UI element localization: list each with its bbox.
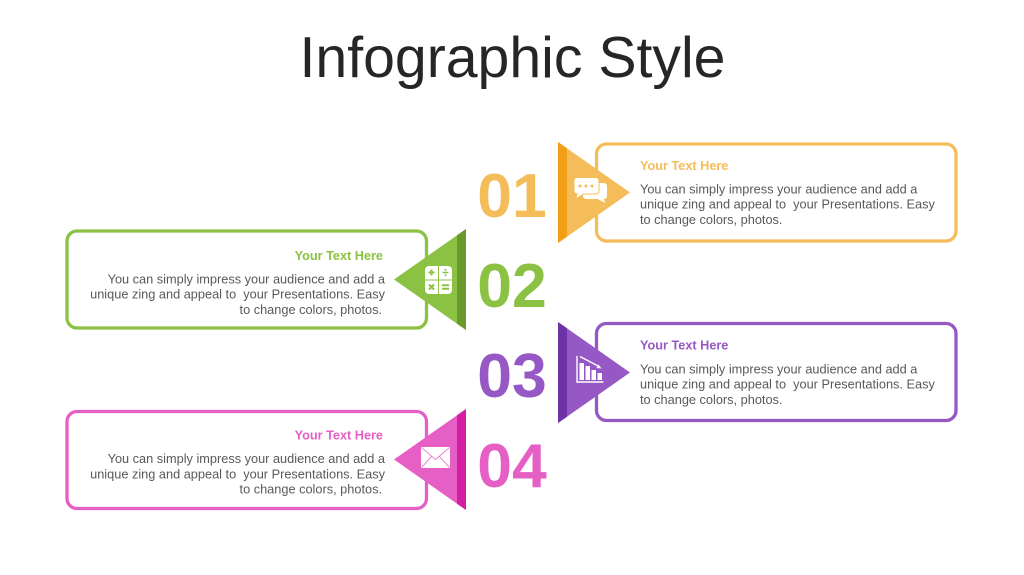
body text 02: unique zing and appeal to your Presentations. Easy — [90, 287, 386, 302]
heading 01: Your Text Here — [640, 159, 728, 173]
body text 01: to change colors, photos. — [640, 212, 782, 227]
number 02: 02 — [477, 251, 547, 321]
arrow 02 — [394, 229, 466, 330]
title: Infographic Style — [300, 26, 725, 90]
text box 04 — [67, 412, 426, 508]
text box 02 — [67, 231, 426, 328]
body text 03: unique zing and appeal to your Presentations. Easy — [640, 377, 935, 392]
heading 03: Your Text Here — [640, 338, 728, 352]
arrow 04 — [394, 409, 466, 510]
panel: step 04 — [67, 409, 547, 510]
panel: step 02 — [67, 229, 547, 330]
body text 04: You can simply impress your audience and add a — [108, 451, 385, 466]
body text 04: unique zing and appeal to your Presentations. Easy — [90, 466, 386, 481]
number 04: 04 — [477, 431, 547, 501]
body text 03: You can simply impress your audience and add a — [640, 361, 917, 376]
heading 04: Your Text Here — [295, 428, 383, 442]
body text 01: You can simply impress your audience and add a — [640, 181, 917, 196]
body text 01: unique zing and appeal to your Presentations. Easy — [640, 197, 935, 212]
panel: step 03 — [477, 322, 956, 423]
body text 02: You can simply impress your audience and add a — [108, 271, 385, 286]
heading 02: Your Text Here — [295, 249, 383, 263]
panel: step 01 — [477, 142, 956, 243]
arrow 03 — [558, 322, 630, 423]
arrow 01 — [558, 142, 630, 243]
body text 03: to change colors, photos. — [640, 392, 782, 407]
text box 03 — [596, 324, 956, 420]
icon: envelope — [421, 447, 450, 468]
icon: bar chart — [577, 356, 604, 382]
body text 04: to change colors, photos. — [240, 482, 382, 497]
icon: speech bubbles — [574, 178, 607, 203]
number 01: 01 — [477, 161, 547, 231]
icon: calculator — [425, 266, 452, 294]
number 03: 03 — [477, 341, 547, 411]
body text 02: to change colors, photos. — [240, 302, 382, 317]
text box 01 — [596, 144, 956, 241]
